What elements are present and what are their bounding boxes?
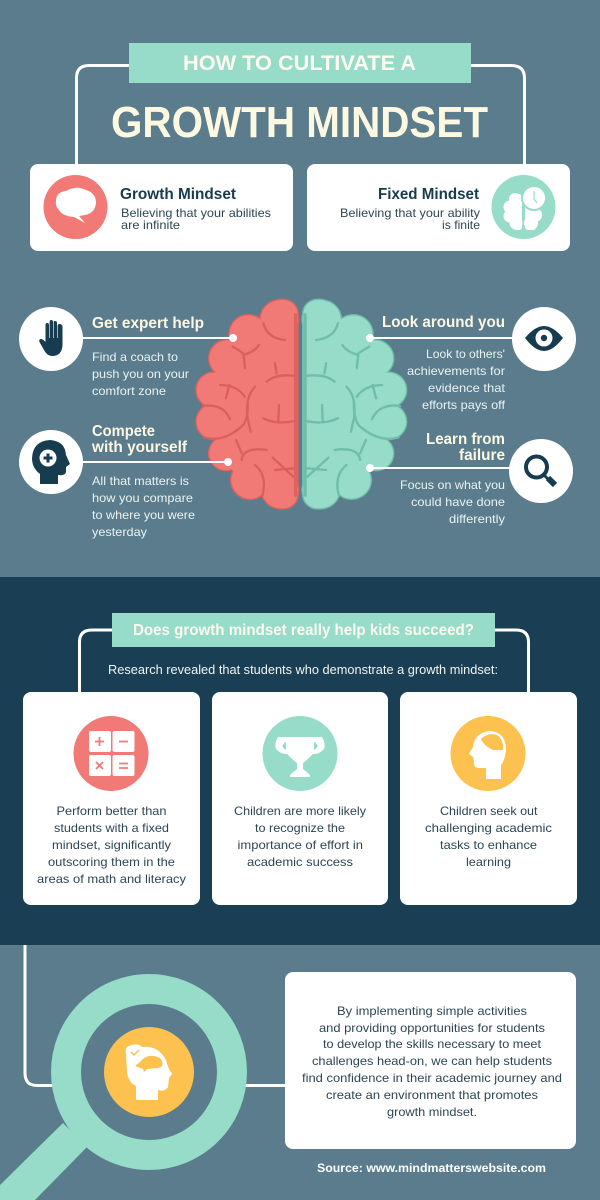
icon: large magnifier	[0, 989, 232, 1200]
icon: eye	[512, 307, 576, 371]
text	[37, 804, 186, 886]
brain: mint right half	[303, 300, 406, 508]
panel: fixed mindset	[307, 164, 570, 251]
panel: challenge card	[400, 692, 577, 905]
block: get expert help	[19, 307, 204, 398]
connector: bottom left	[25, 945, 60, 1086]
icon: head with brain	[450, 716, 526, 791]
heading: Growth Mindset	[120, 186, 237, 203]
heading: Compete	[92, 423, 155, 440]
panel: conclusion: growth mindset.	[387, 1105, 477, 1119]
frame: research connector	[80, 630, 528, 693]
title banner: HOW TO CULTIVATE A	[183, 52, 416, 75]
text: comfort zone	[92, 384, 166, 398]
text	[400, 478, 505, 526]
text	[407, 347, 506, 412]
heading: with yourself	[91, 439, 188, 456]
connector: bottom right	[240, 1084, 286, 1087]
icon: magnifier	[509, 439, 573, 503]
text: achievements for	[407, 364, 505, 378]
description	[340, 206, 480, 232]
connector lines	[80, 338, 515, 468]
description: Believing that your abilities	[121, 206, 271, 220]
block: compete with yourself	[19, 423, 195, 539]
text: mindset, significantly	[52, 838, 171, 852]
frame: title connector	[76, 66, 524, 165]
text	[234, 804, 366, 869]
heading: Learn from	[426, 431, 505, 448]
panel: growth mindset	[30, 164, 293, 251]
text: outscoring them in the	[48, 855, 175, 869]
text	[92, 350, 189, 398]
heading	[91, 423, 188, 456]
text: tasks to enhance	[440, 838, 537, 852]
heading: Fixed Mindset	[378, 186, 480, 203]
icon: head with check	[104, 1027, 194, 1117]
block: learn from failure	[400, 431, 573, 526]
source: Source: www.mindmatterswebsite.com	[317, 1161, 546, 1175]
icon: head	[19, 430, 83, 494]
text: efforts pays off	[422, 398, 506, 412]
panel: conclusion	[285, 972, 576, 1149]
text: how you compare	[92, 491, 193, 505]
text: push you on your	[92, 367, 189, 381]
panel: conclusion: to develop the skills necessary to meet	[323, 1037, 542, 1051]
panel: conclusion: By implementing simple activities	[337, 1004, 527, 1018]
connector dots	[224, 334, 374, 472]
text: learning	[466, 855, 511, 869]
research banner: Does growth mindset really help kids succeed?	[133, 622, 474, 639]
icon: hand	[19, 307, 83, 371]
text: Children seek out	[440, 804, 538, 818]
research intro: Research revealed that students who demonstrate a growth mindset:	[108, 663, 498, 677]
text: evidence that	[428, 381, 506, 395]
description: is finite	[442, 218, 480, 232]
block: look around you	[382, 307, 576, 412]
panel: conclusion: challenges head-on, we can help students	[312, 1054, 552, 1068]
description: are infinite	[121, 218, 180, 232]
section: research background	[0, 577, 600, 945]
icon: trophy	[262, 716, 338, 791]
description: Believing that your ability	[340, 206, 480, 220]
panel: conclusion: create an environment that promotes	[326, 1088, 538, 1102]
text: Focus on what you	[400, 478, 505, 492]
text: Children are more likely	[234, 804, 366, 818]
text: students with a fixed	[54, 821, 169, 835]
text: areas of math and literacy	[37, 872, 186, 886]
text	[92, 474, 195, 539]
title: GROWTH MINDSET	[111, 98, 488, 147]
text: challenging academic	[425, 821, 552, 835]
text: could have done	[411, 495, 505, 509]
text: academic success	[247, 855, 353, 869]
description	[121, 206, 271, 232]
panel: math card	[23, 692, 200, 905]
icon: calculator	[74, 716, 148, 791]
panel: conclusion: and providing opportunities for students	[319, 1021, 545, 1035]
text: Look to others'	[426, 347, 505, 361]
heading: Look around you	[382, 314, 505, 331]
title banner	[129, 43, 471, 83]
research banner	[112, 613, 495, 647]
heading: failure	[459, 447, 505, 464]
panel: conclusion: find confidence in their academic journey and	[302, 1071, 562, 1085]
text: to recognize the	[255, 821, 345, 835]
text: differently	[449, 512, 505, 526]
text: yesterday	[92, 525, 147, 539]
panel: effort card	[212, 692, 388, 905]
icon: brain	[44, 175, 108, 239]
brain: coral left half	[197, 300, 298, 508]
text: Perform better than	[56, 804, 166, 818]
text: All that matters is	[92, 474, 189, 488]
heading	[426, 431, 505, 464]
text: Find a coach to	[92, 350, 178, 364]
icon: brain with clock	[492, 175, 556, 239]
heading: Get expert help	[92, 315, 204, 332]
text: importance of effort in	[238, 838, 363, 852]
text: to where you were	[92, 508, 195, 522]
text	[425, 804, 552, 869]
